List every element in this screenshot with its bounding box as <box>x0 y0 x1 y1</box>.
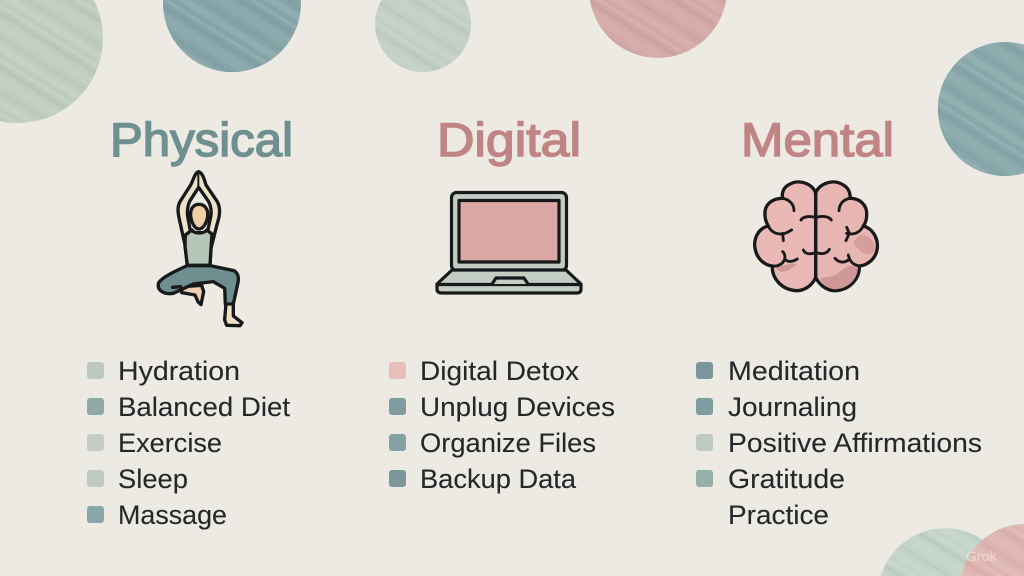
panel: physical <box>110 113 293 326</box>
watermark: Grok <box>966 548 997 564</box>
list: mental items <box>696 356 982 530</box>
decorative circle: top pink <box>590 0 726 58</box>
list: physical items: Sleep <box>118 464 188 494</box>
list: digital items: Organize Files <box>420 428 596 458</box>
list: physical items: Balanced Diet <box>118 392 291 422</box>
heading: Digital: Digital <box>437 113 581 166</box>
icon: laptop <box>437 192 581 293</box>
list: mental items: Journaling <box>728 392 857 422</box>
decorative circle: top left sage <box>0 0 103 123</box>
list: physical items: Exercise <box>118 428 222 458</box>
panel: digital <box>437 113 581 293</box>
list: physical items: Massage <box>118 500 227 530</box>
list: mental items: Positive Affirmations <box>728 428 982 458</box>
decorative circle: top sage small <box>375 0 471 72</box>
panel: mental <box>741 113 894 291</box>
list: physical items: Hydration <box>118 356 240 386</box>
heading: Physical: Physical <box>110 113 293 166</box>
icon: brain <box>755 182 877 291</box>
list: physical items <box>87 356 291 530</box>
decorative circle: right teal <box>938 42 1024 176</box>
decorative circle: bottom pink <box>961 524 1024 576</box>
heading: Mental: Mental <box>741 113 894 166</box>
decorative circle: top teal <box>163 0 301 72</box>
list: digital items <box>389 356 615 494</box>
list: digital items: Digital Detox <box>420 356 580 386</box>
list: mental items: Gratitude <box>728 464 845 494</box>
list: mental items: Practice <box>728 500 829 530</box>
list: digital items: Backup Data <box>420 464 577 494</box>
icon: yoga figure <box>158 172 242 326</box>
list: digital items: Unplug Devices <box>420 392 615 422</box>
list: mental items: Meditation <box>728 356 860 386</box>
decorative circle: bottom sage <box>881 528 1009 576</box>
